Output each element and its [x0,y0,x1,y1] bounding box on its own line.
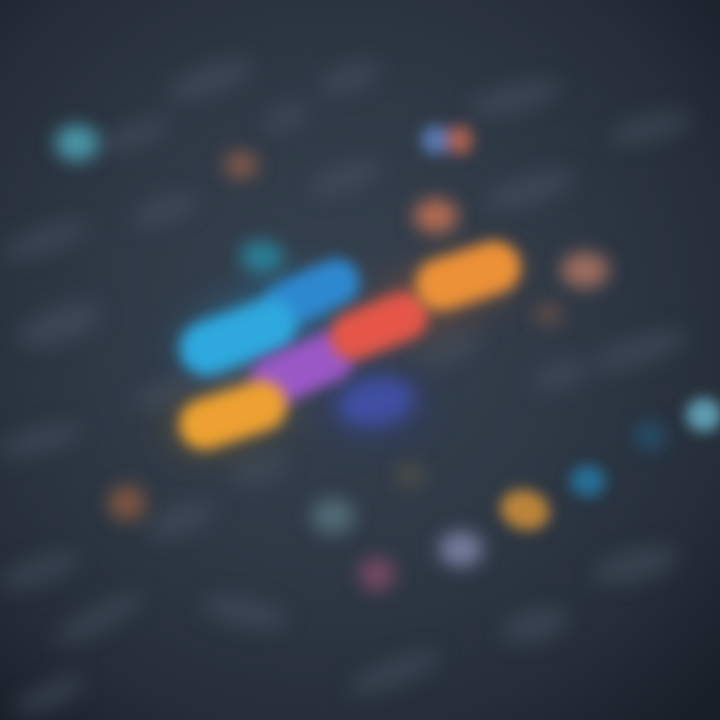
dot: blue lower right [570,465,606,497]
dot: coral [414,199,458,233]
dot: magenta lower [359,557,395,591]
dot: salmon right [561,252,609,288]
dot: grey teal lower [311,498,355,534]
bar: red [323,285,435,367]
dot: dim brown right [533,302,563,326]
bar: cyan [172,291,304,383]
dot: pale blue far right [686,398,720,432]
central bar cluster [158,232,532,467]
bar: orange [409,235,527,317]
dot: teal top left [55,125,99,161]
bar glow [158,232,532,467]
dot: teal centre [240,241,284,273]
bar: blue [257,252,367,334]
dot: lavender lower [439,531,483,567]
bar: yellow orange [173,374,293,456]
bar: purple [244,325,360,413]
dot: brown upper [224,151,258,179]
bar: indigo [335,373,417,431]
dot: amber lower right [496,484,554,536]
dot: blue and orange top [421,125,473,155]
dot: brown lower left [108,485,146,521]
dot: dark blue right [635,422,665,450]
dot: olive centre [395,463,425,487]
